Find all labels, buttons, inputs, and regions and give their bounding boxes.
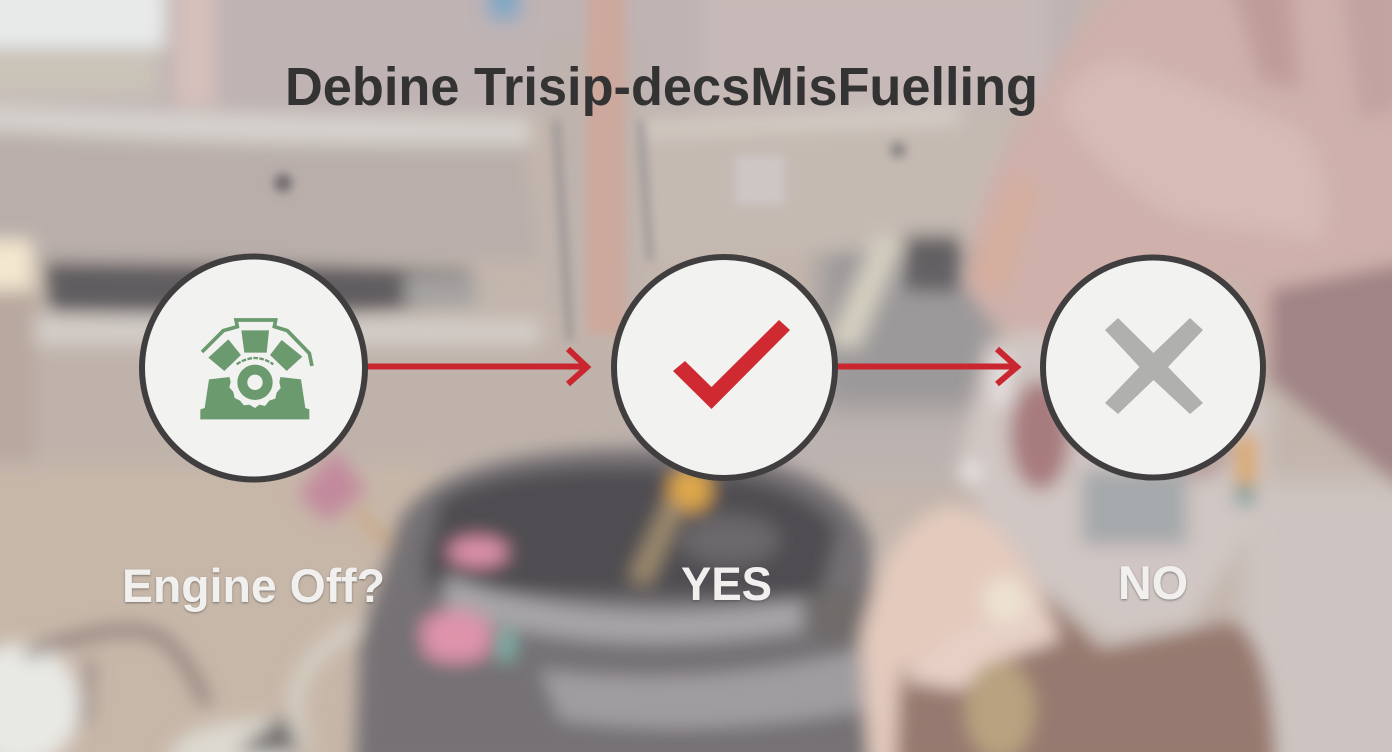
circle: no: [1043, 258, 1263, 478]
bottle: [958, 330, 1270, 640]
icon: engine: [200, 320, 312, 419]
title: Debine Trisip-decsMisFuelling: [285, 57, 1038, 117]
icon: check mark: [673, 320, 790, 409]
icon: cross: [1105, 318, 1203, 414]
step: yes: [614, 257, 835, 478]
label: yes: YES: [681, 557, 772, 610]
label: engine off: Engine Off?: [122, 559, 385, 612]
upper hand: [963, 0, 1392, 500]
label: no: NO: [1118, 556, 1188, 609]
step: engine off: [142, 256, 365, 480]
step: no: [1043, 258, 1263, 478]
arrow: yes to no: [836, 349, 1017, 384]
circle: yes: [614, 257, 835, 478]
canister: [355, 448, 875, 752]
lower hand: [860, 505, 1275, 752]
lower left machinery: [0, 643, 80, 752]
arrow: engine to yes: [366, 349, 588, 384]
circle: engine: [142, 256, 365, 480]
